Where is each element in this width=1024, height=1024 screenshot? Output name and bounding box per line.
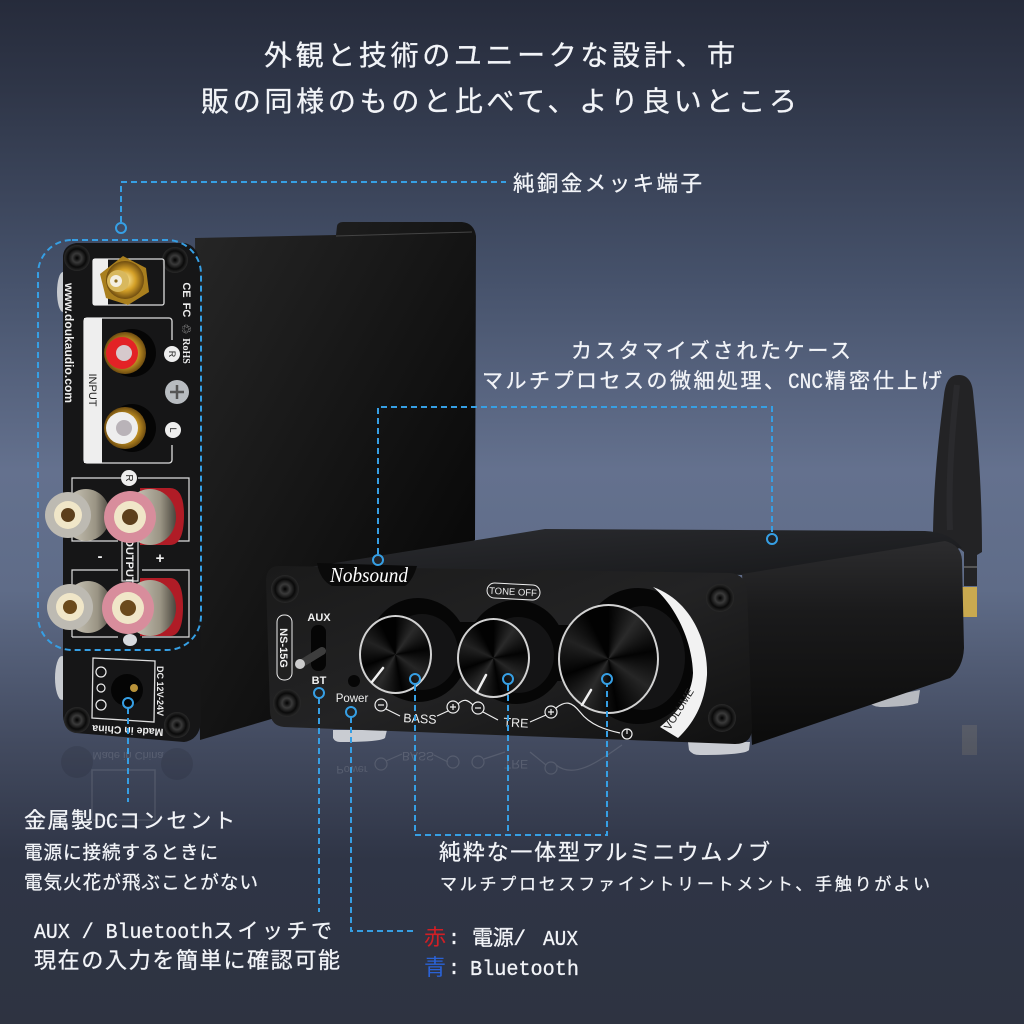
label: DC socket: コンセント: [119, 811, 235, 835]
reflection of amplifier: Power: [336, 763, 368, 775]
amplifier foot right: [688, 742, 750, 755]
antenna: [933, 375, 982, 617]
rear panel screws: [64, 245, 190, 738]
model badge: [277, 615, 292, 680]
callout dots: [116, 223, 777, 717]
antenna gold connector: [962, 587, 977, 617]
bass and treble legend: TRE: [503, 715, 529, 731]
label: AUX Bluetooth switch: スイッチで: [213, 922, 332, 945]
binding posts: [45, 488, 184, 636]
tone off badge: TONE OFF: [489, 586, 537, 599]
bottom centre foot peeking: [123, 634, 137, 646]
reflection of amplifier: BASS: [402, 749, 434, 763]
terminal labels: OUTPUT: [123, 538, 135, 584]
label: custom case: [482, 340, 942, 395]
DC jack box: [92, 658, 165, 738]
knob barrels: [386, 606, 685, 710]
antenna port box: [93, 256, 164, 305]
certification marks: ♲: [181, 324, 191, 334]
reflection of amplifier: [336, 725, 977, 775]
knob indicator lines: [372, 668, 591, 705]
label: custom case: CNC: [788, 370, 823, 395]
certification marks: FC: [180, 303, 192, 317]
certification marks: RoHS: [180, 338, 191, 364]
model badge: NS-15G: [277, 628, 289, 668]
bass and treble legend: [375, 699, 632, 739]
legend: red and blue indicator: :: [448, 928, 460, 951]
label: aluminium knobs: 純粋な一体型アルミニウムノブ: [439, 841, 770, 867]
legend: red and blue indicator: Bluetooth: [470, 959, 579, 982]
AUX / BT switch: [295, 612, 331, 687]
input box: INPUT: [86, 374, 98, 407]
label: AUX Bluetooth switch: AUX / Bluetooth: [34, 922, 213, 945]
logo: Nobsound: [329, 563, 408, 587]
DC jack box: DC 12V-24V: [155, 666, 165, 716]
input box: R: [167, 351, 177, 358]
amplifier right side: [742, 541, 964, 745]
title: 販の同様のものと比べて、より良いところ: [201, 86, 797, 120]
certification marks: CE: [180, 282, 192, 298]
amplifier foot left: [333, 730, 387, 742]
rear feet: [57, 272, 69, 312]
legend: red and blue indicator: :: [448, 958, 460, 981]
terminal labels: +: [156, 550, 165, 567]
label: DC socket: 電気火花が飛ぶことがない: [24, 873, 258, 895]
power LED: Power: [336, 693, 368, 705]
legend: red and blue indicator: 青: [424, 955, 446, 980]
label: custom case: 精密仕上げ: [825, 370, 942, 395]
volume arc: VOLUME: [662, 687, 697, 732]
treble knob: [457, 618, 530, 698]
volume knob: [558, 604, 659, 714]
bass and treble legend: BASS: [403, 711, 437, 727]
label: DC socket: 電源に接続するときに: [24, 843, 218, 865]
label: AUX Bluetooth switch: [34, 922, 340, 975]
input box: [84, 318, 189, 463]
rear panel: [45, 243, 201, 742]
AUX / BT switch: BT: [312, 675, 327, 687]
knob wells: [368, 588, 698, 724]
legend: red and blue indicator: 電源/: [472, 927, 526, 952]
power LED: [336, 675, 368, 705]
legend: red and blue indicator: 赤: [424, 925, 446, 950]
output terminals frame: [72, 478, 189, 637]
amplifier top surface: [310, 529, 962, 575]
volume arc: [653, 587, 707, 738]
label: AUX Bluetooth switch: 現在の入力を簡単に確認可能: [34, 949, 340, 975]
rear unit: case body: [57, 222, 476, 740]
amplifier foot rear: [867, 690, 920, 707]
label: aluminium knobs: [439, 841, 930, 896]
certification marks: [180, 282, 192, 364]
AUX / BT switch: AUX: [307, 612, 331, 624]
label: custom case: マルチプロセスの微細処理、: [482, 370, 785, 395]
tone off badge: [487, 583, 540, 600]
terminal labels: R: [123, 474, 134, 482]
label: DC socket: [24, 809, 258, 895]
legend: red and blue indicator: AUX: [543, 929, 578, 952]
title: [201, 40, 797, 120]
reflection of amplifier: TRE: [504, 757, 528, 771]
website text: www.doukaudio.com: [62, 282, 74, 403]
reflection of rear panel: Made in China: [93, 749, 164, 761]
legend: red and blue indicator: [424, 925, 579, 982]
callout lines: [38, 182, 772, 931]
amplifier front face: [266, 566, 752, 744]
label: aluminium knobs: マルチプロセスファイントリートメント、手触りがよい: [440, 875, 930, 896]
terminal labels: -: [98, 548, 102, 565]
reflection of rear panel: [61, 746, 193, 820]
rear foot lower: [55, 656, 69, 700]
label: DC socket: 金属製: [24, 809, 93, 835]
label: custom case: カスタマイズされたケース: [571, 340, 851, 365]
label: copper connector: 純銅金メッキ端子: [513, 172, 702, 198]
bass knob: [359, 615, 432, 694]
terminal labels: [98, 470, 165, 584]
DC jack box: Made in China: [92, 722, 164, 738]
input box: L: [168, 427, 178, 433]
label: DC socket: DC: [94, 810, 118, 835]
title: 外観と技術のユニークな設計、市: [264, 40, 735, 74]
front screws: [271, 575, 736, 732]
